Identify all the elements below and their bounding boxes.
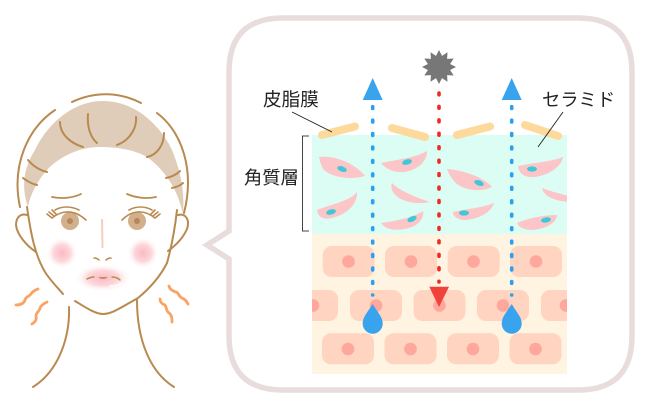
stratum corneum layer <box>312 135 567 234</box>
face outline <box>16 207 188 387</box>
label: セラミド: セラミド <box>542 89 615 110</box>
mouth <box>74 264 132 292</box>
label: 皮脂膜 <box>263 89 332 132</box>
label: セラミド <box>538 89 615 147</box>
sebum film bars <box>322 125 558 137</box>
left eye <box>47 207 86 230</box>
hair <box>24 101 183 214</box>
nose <box>94 219 111 260</box>
cell nuclei <box>307 255 572 355</box>
icon: irritant particle <box>422 50 456 84</box>
corneocyte nuclei <box>325 158 551 223</box>
skin cross-section <box>312 135 567 374</box>
arrow: water escaping, left <box>363 78 383 334</box>
arrow: irritant entering skin <box>429 93 449 307</box>
label: 皮脂膜: 皮脂膜 <box>263 89 319 110</box>
right eye <box>122 207 160 230</box>
living skin cells <box>312 246 567 364</box>
lower skin layer <box>312 234 567 374</box>
panel: woman's face <box>16 94 188 387</box>
eyebrows <box>52 194 156 198</box>
panel: speech bubble <box>207 18 632 390</box>
label: 角質層 with bracket: 角質層 <box>244 167 299 188</box>
corneocyte cells <box>317 151 570 230</box>
arrow: water escaping, right <box>502 78 522 334</box>
cheek blush <box>46 237 159 269</box>
irritation squiggles <box>16 286 188 324</box>
hair outline <box>18 94 188 213</box>
label: 角質層 with bracket <box>244 136 309 231</box>
